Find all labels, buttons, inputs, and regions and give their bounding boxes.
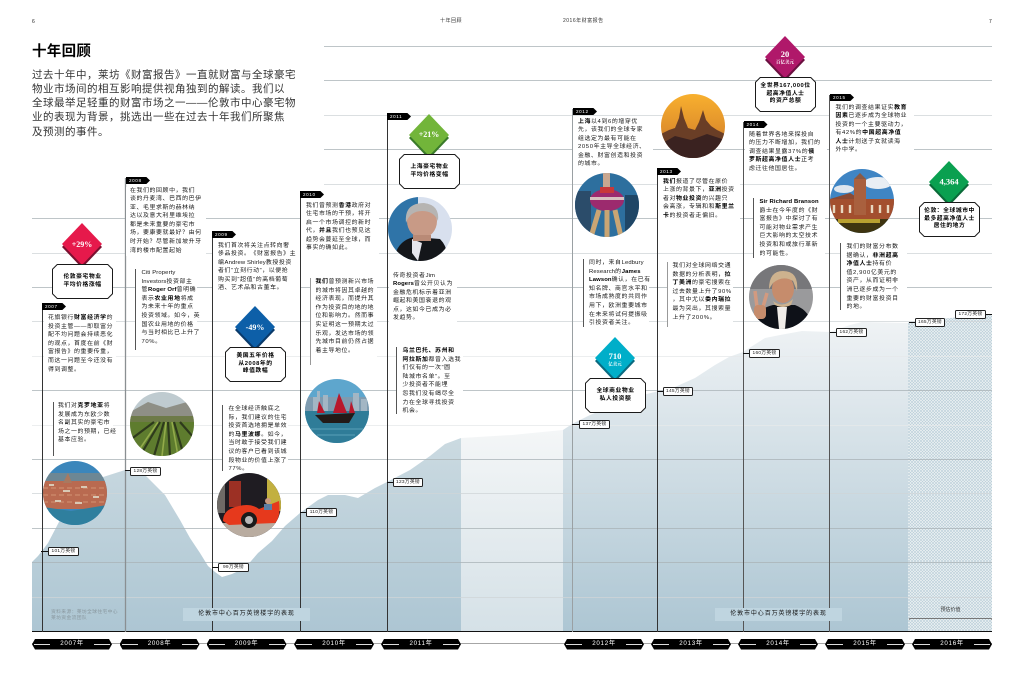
text 2008: 达以及意大利里维埃拉 <box>130 213 195 219</box>
text 2009 <box>213 242 300 294</box>
text 2012: 2050年主导全球经济、 <box>578 144 646 150</box>
text 2011 Rogers: 传奇投资者Jim <box>393 272 435 278</box>
text 2014: 随着世界各地来探投自 <box>749 132 814 138</box>
photo: vineyard <box>130 392 194 456</box>
text 2011 Ulaanbaatar: 少投资者不能埋 <box>402 382 448 388</box>
text 2010 emerging <box>310 278 377 365</box>
text 2009: 侈品投资。《财富报告》主 <box>218 251 296 257</box>
text 2009: 编Andrew Shirley教授投资 <box>218 260 292 266</box>
text 2013: 我们报道了尽管在原价 <box>663 178 728 184</box>
text 2013 Latin America: 最为突出，其搜索量 <box>672 306 731 312</box>
text 2015: 外中学。 <box>836 147 862 153</box>
text 2009: 我们首次将关注点转向奢 <box>218 242 290 248</box>
diamond: 710: 710 <box>609 351 621 361</box>
text 2009 Miami: 际，我们建议的住宅 <box>228 415 287 421</box>
diamond: 4,364: 4,364 <box>939 176 959 186</box>
text 2008: 在我们的回顾中，我们 <box>130 188 195 194</box>
tag 2011: 2011 <box>390 114 402 119</box>
text 2009: 酒、艺术品和古董车。 <box>218 285 283 291</box>
callout: US decline <box>225 347 286 382</box>
title: 十年回顾 <box>32 44 91 60</box>
value label 99: 99万英镑 <box>223 565 244 570</box>
connector <box>212 567 218 568</box>
intro text: 物业市场间的相互影响提供视角独到的解读。我们以 <box>32 83 285 95</box>
text 2013 Latin America <box>667 262 733 327</box>
text 2007 Croatia: 基本应验。 <box>58 437 91 443</box>
text 2007 Croatia <box>53 402 113 456</box>
chart label left <box>183 608 310 621</box>
text 2008: 都是未来重要的豪宅市 <box>130 222 195 228</box>
value label 101 <box>48 547 79 556</box>
text 2010: 住宅市场的干预，将开 <box>306 211 371 217</box>
text 2010: 事实的确如此。 <box>306 245 352 251</box>
text 2008: 谈的丹麦湾、巴西的巴伊 <box>130 196 202 202</box>
text 2010 emerging: 实证明这一预期太过 <box>316 322 374 328</box>
connector <box>41 551 48 552</box>
callout: UHNWI wealth: 的资产总额 <box>770 98 801 104</box>
value label 128 <box>130 466 161 476</box>
tag 2014: 2014 <box>746 122 759 127</box>
estimated value note: 预估价值 <box>940 607 960 613</box>
value label 160 <box>749 349 780 358</box>
chart label left: 伦敦市中心百万英镑楼宇的表现 <box>198 611 295 617</box>
page number right: 7 <box>989 19 992 25</box>
text 2007: 富报告》的重要传重， <box>48 349 113 355</box>
pill 2011 <box>381 639 461 650</box>
photo: Hong Kong junk <box>305 379 369 443</box>
text 2009 Miami: 在全球经济触底之 <box>228 406 281 412</box>
chart label right <box>715 608 842 621</box>
text 2007: 而这一问题至今还没有 <box>48 358 113 364</box>
callout: London average <box>52 264 113 299</box>
text 2012 Ledbury: Lawson确认，在已有 <box>589 277 651 283</box>
callout: UHNWI wealth: 全世界167,000位 <box>760 83 811 89</box>
text 2012 Ledbury: 同时，来自Ledbury <box>589 260 644 266</box>
diamond: -49%: -49% <box>246 323 264 332</box>
panel: 2012 <box>572 108 653 429</box>
value label 165 <box>915 318 945 327</box>
pill 2007: 2007年 <box>60 640 84 647</box>
text 2007: 投资主管——即取富分 <box>48 324 113 330</box>
connector <box>743 353 749 354</box>
text 2010 emerging: 乐观，发达市场的领 <box>316 331 374 337</box>
text 2008: 亚、毛里求斯的赫林纳 <box>130 205 195 211</box>
text 2009: 者们“立刻行动”，以便抢 <box>218 268 288 274</box>
text 2015: 我们的调查结果证实教育 <box>836 104 907 110</box>
text 2008 Citi: 70%。 <box>142 339 162 345</box>
diamond: -49% <box>235 306 275 347</box>
callout: US decline: 从2008年的 <box>238 361 273 367</box>
diamond: +29%: +29% <box>72 240 92 249</box>
text 2012: 上海以4到6的增穿优 <box>578 118 638 124</box>
intro text: 全球最举足轻重的财富市场之一——伦敦市中心豪宅物 <box>32 97 296 109</box>
text 2012 Ledbury: 引投资者关注。 <box>589 320 635 326</box>
intro text <box>32 68 296 138</box>
pill 2007 <box>32 639 112 650</box>
text 2015 Africa: 净值人士持有价 <box>846 261 892 267</box>
tag 2009 <box>212 231 236 238</box>
text 2014 Branson: 可能对物业需求产生 <box>760 225 818 231</box>
text 2013: 上涨的背景下，亚洲投资 <box>663 187 735 193</box>
year axis <box>32 632 992 644</box>
panel: 2009 <box>212 231 300 572</box>
photo: Richard Branson <box>749 265 813 329</box>
value label 162: 162万英镑 <box>840 330 863 335</box>
tag 2014 <box>744 121 768 128</box>
value label 110 <box>306 508 337 517</box>
connector <box>125 470 130 471</box>
text 2013 Latin America: 我们对全球网络交通 <box>672 263 731 269</box>
pill 2009: 2009年 <box>235 640 258 647</box>
text 2013 Latin America: 数据的分析表明，拉 <box>672 272 731 278</box>
text 2011 Rogers: 崛起和美国衰退的观 <box>393 298 452 304</box>
value label 137: 137万英镑 <box>583 422 606 427</box>
pill 2012 <box>564 639 644 650</box>
text 2007: 得到调整。 <box>48 367 81 373</box>
text 2013: 者对物业投资的兴趣只 <box>663 196 728 202</box>
photo: Oxford college <box>830 169 894 233</box>
pill 2016: 2016年 <box>940 640 964 647</box>
callout: commercial property: 全球商业物业 <box>596 388 635 394</box>
diamond: 20: 20 <box>781 49 789 59</box>
value label 128: 128万英镑 <box>134 468 157 474</box>
year axis pills <box>32 639 992 650</box>
text 2013: 会高涨，专辑和和斯里兰 <box>663 204 735 210</box>
tag 2011 <box>387 113 411 120</box>
text 2012 Ledbury: 用下，欧洲重要城市 <box>589 303 648 309</box>
value label 110: 110万英镑 <box>310 510 333 515</box>
text 2010 emerging: 着主导地位。 <box>316 348 355 354</box>
source note <box>51 608 118 621</box>
text 2014 Branson: 投资和和或旅行革新 <box>760 242 818 248</box>
value label 172: 172万英镑 <box>959 312 982 317</box>
callout: commercial property <box>585 378 646 413</box>
text 2011 Rogers: 金融危机标示着亚洲 <box>393 290 452 296</box>
text 2011 Ulaanbaatar: 怨我们没有竭尽全 <box>402 391 455 397</box>
connector <box>657 391 663 392</box>
diamond: +21% <box>409 114 449 154</box>
text 2011 Ulaanbaatar: 们仅有的一次“圆 <box>402 365 451 371</box>
panel: 2013 <box>657 94 740 396</box>
tag 2009: 2009 <box>215 232 228 237</box>
text 2011 Rogers <box>389 272 457 324</box>
photo: Jim Rogers <box>388 197 452 261</box>
text 2015 <box>830 104 914 156</box>
pill 2010: 2010年 <box>322 640 346 647</box>
text 2009: 购买到“超值”的高档葡萄 <box>218 277 288 283</box>
text 2014: 调查结果显露37%的俄 <box>749 149 815 155</box>
text 2012: 先，该我们的全球专家 <box>578 127 643 133</box>
text 2015 Africa <box>840 243 907 310</box>
intro text: 业的表现为背景，挑选出一些在过去十年我们所聚焦 <box>32 111 285 123</box>
text 2008 Citi: 国农业用地的价格 <box>142 322 194 328</box>
pill 2014: 2014年 <box>766 640 790 647</box>
pill 2015 <box>825 639 905 650</box>
text 2015 Africa: 洲已逐步成为一个 <box>846 287 899 293</box>
photo: Dubrovnik <box>43 461 107 525</box>
connector <box>830 332 836 333</box>
text 2007 Croatia: 名副其实的豪宅市 <box>58 420 110 426</box>
text 2010 emerging: 的城市将因其卓越的 <box>316 288 374 294</box>
text 2007 Croatia: 发展成为东欧少数 <box>58 412 110 418</box>
panel: 2007 <box>41 223 117 556</box>
area: price curve 2012 to 2015 <box>563 322 908 631</box>
connector 165 <box>909 322 915 323</box>
panel: 2010 <box>300 191 379 517</box>
text 2012 <box>573 118 653 170</box>
text 2012: 金融、财富创造和投资 <box>578 153 643 159</box>
text 2014 Branson: 巨大影响的太空技术 <box>760 233 818 239</box>
text 2009 Miami: 段物业的价值上涨了 <box>228 458 287 464</box>
text 2014 Branson: 的可能性。 <box>760 251 792 257</box>
text 2010 emerging: 经济表现，而提升其 <box>316 296 374 302</box>
text 2011 Ulaanbaatar: 阿拉斯加都曾入选我 <box>402 357 461 363</box>
callout: UHNWI wealth <box>755 77 816 112</box>
text 2009 Miami: 议的客户已看到该城 <box>228 449 287 455</box>
callout: London richest city <box>919 202 980 237</box>
chart label right: 伦敦市中心百万英镑楼宇的表现 <box>730 611 827 617</box>
text 2012 Ledbury: 知名牌、商官水平和 <box>589 286 648 292</box>
text 2011 Ulaanbaatar: 乌兰巴托、苏州和 <box>402 348 455 354</box>
area: hatched forecast 2016 <box>908 314 992 631</box>
text 2009 Miami: 的马里波娜。如今， <box>228 432 287 438</box>
text 2012 Ledbury: 市场成熟度的共同作 <box>589 294 648 300</box>
value label 172 <box>955 310 986 319</box>
text 2008: 湾的楼市配置起始 <box>130 248 182 254</box>
text 2013 Latin America: 上升了200%。 <box>672 315 716 321</box>
text 2015 Africa: 值2,900亿美元的 <box>846 270 897 276</box>
text 2013 Latin America: ，其中尤以委内瑞拉 <box>672 297 731 303</box>
forecast bracket <box>909 618 992 620</box>
source note: 资料来源：莱坊全球住宅中心 <box>51 610 118 615</box>
intro text: 过去十年中，莱坊《财富报告》一直就财富与全球豪宅 <box>32 68 296 80</box>
text 2011 Rogers: 发趋势。 <box>393 315 419 321</box>
text 2008: 场，要康要就最好？由何 <box>130 230 202 236</box>
text 2015: 投资的一个主要驱动力， <box>836 122 907 128</box>
text 2008 Citi <box>135 269 197 350</box>
text 2014 Branson: Sir Richard Branson <box>760 199 819 205</box>
diamond: 4,364 <box>929 161 969 202</box>
callout: commercial property: 私人投资额 <box>600 396 631 402</box>
text 2010: 我们曾预测香港政府对 <box>306 202 371 208</box>
text 2008 Citi: Investors投资部主 <box>142 279 193 285</box>
tag 2015 <box>830 94 854 101</box>
text 2009 Miami <box>222 405 288 471</box>
text 2014 Branson <box>753 198 825 258</box>
text 2015 Africa: 资产，从而证明非 <box>846 278 899 284</box>
area: price curve 2007 to 2011 <box>32 438 461 631</box>
text 2007 <box>44 314 116 375</box>
text 2010 emerging: 我们曾预测新兴市场 <box>316 279 374 285</box>
running head report name: 2016年财富报告 <box>563 18 604 24</box>
tag 2007: 2007 <box>45 304 58 309</box>
text 2011 Ulaanbaatar: 陆城市名单”。至 <box>402 374 451 380</box>
text 2009 Miami: 投资首选地拥是单效 <box>228 423 287 429</box>
text 2012 Ledbury <box>583 259 649 327</box>
value label 160: 160万英镑 <box>753 351 776 356</box>
text 2013: 卡的投资者走偏旧。 <box>663 213 722 219</box>
text 2008 Citi: 为未来十年的重点 <box>142 304 194 310</box>
text 2010: 启一个市场调控的新时 <box>306 220 371 226</box>
grid lines <box>32 46 992 598</box>
photo: Shanghai Pearl Tower <box>575 173 639 237</box>
text 2011 Ulaanbaatar <box>396 347 463 414</box>
callout: Shanghai: 上海豪宅物业 <box>410 164 449 170</box>
text 2011 Ulaanbaatar: 机会。 <box>402 408 422 414</box>
value label 137 <box>579 420 610 429</box>
text 2011 Ulaanbaatar: 力在全球寻找投资 <box>402 400 455 406</box>
tag 2013: 2013 <box>660 169 673 174</box>
text 2007 Croatia: 我们对克罗地亚将 <box>58 403 110 409</box>
value label 162 <box>836 328 867 337</box>
text 2013 <box>658 178 740 221</box>
callout: London average: 平均价格涨幅 <box>63 282 102 288</box>
text 2015 Africa: 的地。 <box>846 304 866 310</box>
text 2007: 花旗银行财富经济学的 <box>48 315 113 321</box>
diamond: 20: 百亿美元 <box>776 58 794 66</box>
tag 2008 <box>126 177 150 184</box>
panel: 2011 <box>387 113 463 487</box>
text 2008: 时开始？尽管新加坡升牙 <box>130 239 202 245</box>
connector <box>300 512 306 513</box>
callout: US decline: 峰值跌幅 <box>243 368 268 374</box>
text 2015 Africa: 据确认，非洲超高 <box>846 253 899 259</box>
diamond: +21%: +21% <box>419 130 439 139</box>
year vertical lines <box>42 95 830 632</box>
diamond: 710: 亿美元 <box>608 360 622 368</box>
value label 165: 165万英镑 <box>918 320 942 325</box>
text 2012: 组选定为最有可能在 <box>578 136 637 142</box>
text 2015: 人士计划送子女就读海 <box>836 139 901 145</box>
text 2010 emerging: 作为投资目的地的地 <box>316 305 374 311</box>
callout: London average: 伦敦豪宅物业 <box>63 274 102 280</box>
text 2011 Rogers: 点，这如今已成为必 <box>393 307 452 313</box>
text 2012: 的城市。 <box>578 161 604 167</box>
pill 2011: 2011年 <box>410 640 432 647</box>
area: faded middle segment <box>461 430 563 631</box>
pill 2013 <box>651 639 731 650</box>
callout: US decline: 美国五年价格 <box>236 353 275 359</box>
text 2008 Citi: 管Roger Orf曾明确 <box>142 287 196 293</box>
text 2008 <box>126 186 206 256</box>
text 2015 Africa: 我们的财富分布数 <box>846 244 899 250</box>
photo: Bagan sunset <box>661 94 725 158</box>
text 2012 Ledbury: 在未来将试何提振吸 <box>589 312 648 318</box>
diamond: +29% <box>62 223 102 264</box>
tag 2010: 2010 <box>303 192 316 197</box>
text 2008 Citi: 与当时相比已上升了 <box>142 330 200 336</box>
tag 2007 <box>42 303 66 310</box>
pill 2016 <box>912 639 992 650</box>
value label 145: 145万英镑 <box>666 389 690 394</box>
text 2010 emerging: 先城市目前仍然占据 <box>316 339 374 345</box>
text 2014 Branson: 富报告》中探讨了有 <box>760 216 818 222</box>
page number left: 6 <box>32 19 35 25</box>
text 2010: 趋势会蔓延至全球，而 <box>306 237 371 243</box>
tag 2012: 2012 <box>576 109 589 114</box>
callout: UHNWI wealth: 超高净值人士 <box>766 91 805 97</box>
connector <box>572 424 579 425</box>
diamond: 710 <box>595 337 635 378</box>
text 2008 Citi: Citi Property <box>142 270 175 276</box>
callout: London richest city: 居住的地方 <box>934 223 965 229</box>
text 2010: 代，并且我们也预见这 <box>306 228 371 234</box>
photo: red car <box>217 473 281 537</box>
text 2013 Latin America: 丁美洲的豪宅搜索在 <box>672 280 731 286</box>
text 2013 Latin America: 过去数量上升了90% <box>672 289 732 295</box>
value label 101: 101万英镑 <box>52 549 75 554</box>
text 2007: 配不均问题会持续恶化 <box>48 332 113 338</box>
text 2010 emerging: 位和影响力。然而事 <box>316 313 374 319</box>
text 2014: 罗斯超高净值人士正考 <box>749 157 814 163</box>
text 2015 Africa: 重要的财富投资目 <box>846 296 899 302</box>
callout: Shanghai <box>399 154 460 189</box>
panel: 2016 forecast labels <box>909 310 992 620</box>
text 2014 Branson: 爵士在今年度的《财 <box>760 208 818 214</box>
callout: London richest city: 伦敦：全球城市中 <box>924 208 975 214</box>
text 2010 <box>301 202 379 254</box>
value label 123 <box>393 478 423 487</box>
panel: 2015 <box>830 94 980 337</box>
pill 2015: 2015年 <box>853 640 877 647</box>
pill 2008 <box>120 639 200 650</box>
panel: 2008 <box>125 177 206 476</box>
text 2015: 有42%的中国超高净值 <box>836 130 901 136</box>
tag 2013 <box>657 168 681 175</box>
tag 2012 <box>573 108 597 115</box>
callout: Shanghai: 平均价格变幅 <box>410 172 449 178</box>
pill 2009 <box>206 639 286 650</box>
pill 2013: 2013年 <box>679 640 703 647</box>
diamond: 20 <box>765 36 805 77</box>
text 2008 Citi: 表示农业用地将成 <box>142 296 194 302</box>
pill 2008: 2008年 <box>148 640 171 647</box>
tag 2008: 2008 <box>129 178 142 183</box>
source note: 莱坊资金流团队 <box>51 616 87 621</box>
text 2009 Miami: 77%。 <box>228 466 249 472</box>
text 2012 Ledbury: Research的James <box>589 269 641 275</box>
panel: 2014 <box>743 36 827 358</box>
text 2015: 因素已逐步成为全球物业 <box>836 113 907 119</box>
text 2014: 的压力不断增加，我们的 <box>749 140 821 146</box>
value label 99 <box>218 563 249 572</box>
text 2007: 的观点，首度在前《财 <box>48 341 113 347</box>
connector <box>387 482 393 483</box>
tag 2010 <box>300 191 324 198</box>
intro text: 及预测的事件。 <box>32 126 109 138</box>
text 2014: 虑迁往他国居住。 <box>749 166 801 172</box>
value label 145 <box>663 387 693 396</box>
connector 172 <box>986 314 992 315</box>
callout: London richest city: 最多超高净值人士 <box>924 216 975 222</box>
text 2014 <box>744 130 826 174</box>
pill 2012: 2012年 <box>592 640 616 647</box>
text 2008 Citi: 投资领域。如今，英 <box>142 313 200 319</box>
tag 2015: 2015 <box>833 95 846 100</box>
running head: 十年回顾 <box>440 18 462 24</box>
value label 123: 123万英镑 <box>396 480 420 485</box>
text 2011 Rogers: Rogers曾公开贝认为 <box>393 281 453 287</box>
text 2007 Croatia: 场之一的预期，已经 <box>58 429 117 435</box>
text 2009 Miami: 当时敢于接受我们建 <box>228 440 287 446</box>
pill 2014 <box>738 639 818 650</box>
pill 2010 <box>294 639 374 650</box>
